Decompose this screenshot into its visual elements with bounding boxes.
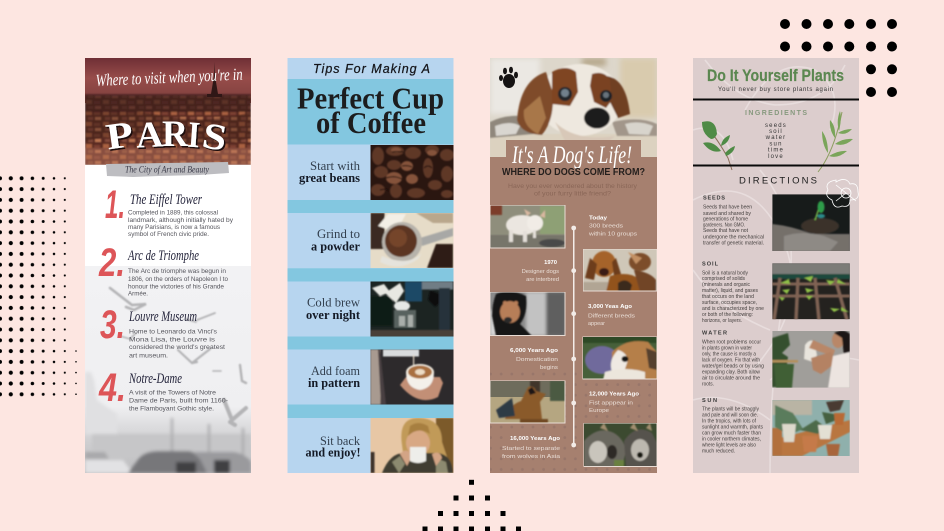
section: water: air to circulate around the bbox=[702, 376, 760, 382]
panel background bbox=[288, 58, 454, 473]
event: 12,000 years ago: 12,000 Years Ago bbox=[589, 392, 639, 398]
item 2: Arc de Triomphe: 2. bbox=[98, 241, 125, 285]
ingredients list: love bbox=[768, 154, 784, 160]
decoration: round dots top right bbox=[780, 19, 897, 97]
section: seeds: Seeds that have been bbox=[703, 204, 752, 210]
panel: DIY plants bbox=[693, 58, 859, 473]
event: 3,000 years ago bbox=[588, 304, 635, 327]
section: soil: (minerals and organic bbox=[702, 282, 750, 288]
intro text: of your furry little friend? bbox=[534, 190, 612, 198]
heading: directions: DIRECTIONS bbox=[739, 176, 817, 186]
section: sun: SUN bbox=[702, 398, 717, 404]
event: 3,000 years ago: Different breeds bbox=[588, 314, 635, 320]
ingredients list: INGREDIENTS bbox=[745, 110, 807, 117]
section: sun: in cooler northern climates, bbox=[702, 437, 761, 443]
event: 12,000 years ago: Fist apppear in bbox=[589, 401, 633, 407]
item 4: Notre-Dame: 4. bbox=[98, 366, 126, 410]
step 2: grind to a powder: Grind to bbox=[317, 226, 360, 241]
decoration: halftone dots left bbox=[0, 173, 77, 400]
section: soil: horizons, or layers. bbox=[702, 318, 742, 324]
heading: where do dogs come from: WHERE DO DOGS COME FROM? bbox=[502, 167, 645, 178]
photo: german shepherd bbox=[490, 380, 566, 424]
brush banner: subtitle bbox=[106, 162, 229, 177]
title: PARIS: P bbox=[103, 114, 136, 158]
header photo: Paris skyline bbox=[85, 58, 251, 165]
title: PARIS: I bbox=[187, 115, 201, 156]
item 3: Louvre Museum: Home to Leonardo da Vinci's bbox=[129, 328, 217, 335]
item 1: Eiffel Tower: 1. bbox=[105, 183, 125, 227]
item 1: Eiffel Tower: landmark, although initially hated by bbox=[128, 217, 234, 224]
step 3: cold brew over night: over night bbox=[306, 307, 361, 322]
title: where to visit: Where to visit when you're in bbox=[95, 65, 243, 90]
panel background bbox=[693, 58, 859, 473]
icon: right leaf branch bbox=[818, 111, 853, 172]
item 2: Arc de Triomphe: honour the victories of his Grande bbox=[128, 283, 225, 290]
item 2: Arc de Triomphe: Arc de Triomphe bbox=[127, 248, 199, 264]
section: water bbox=[702, 331, 850, 388]
section: soil: and is characterized by one bbox=[702, 306, 764, 312]
heading: perfect cup of coffee: of Coffee bbox=[316, 105, 426, 140]
intro text bbox=[508, 183, 638, 198]
section: water: water/gel beads or by using bbox=[702, 364, 764, 370]
item 3: Louvre Museum: 3. bbox=[100, 303, 125, 347]
divider bottom bbox=[693, 164, 859, 166]
step 5: sit back and enjoy: and enjoy! bbox=[306, 445, 360, 460]
step 4: add foam in pattern bbox=[308, 350, 454, 404]
item 3: Louvre Museum: Mona Lisa, the Louvre is bbox=[129, 336, 215, 343]
photo: hands with seedling bbox=[772, 194, 850, 251]
item 2: Arc de Triomphe: The Arc de triomphe was begun in bbox=[128, 268, 227, 275]
event: 12,000 years ago: Europe bbox=[589, 408, 609, 414]
event: 16,000 years ago bbox=[502, 436, 561, 460]
item 1: Eiffel Tower bbox=[105, 183, 234, 238]
section: sun bbox=[702, 398, 850, 456]
photo: seedlings in tray bbox=[772, 263, 850, 320]
section: water: expanding clay. Both allow bbox=[702, 370, 760, 376]
event: 3,000 years ago: 3,000 Yeas Ago bbox=[588, 304, 632, 310]
step 3: cold brew over night: Cold brew bbox=[307, 295, 361, 310]
sky-blue bands bbox=[288, 79, 454, 418]
section: sun: and pale and will soon die. bbox=[702, 413, 758, 419]
panel: dog timeline bbox=[490, 58, 657, 473]
section: soil: comprised of solids bbox=[702, 276, 745, 282]
event: today: within 10 groups bbox=[588, 232, 637, 238]
step 4: add foam in pattern: Add foam bbox=[311, 363, 360, 378]
event: 6,000 years ago: Domestication bbox=[516, 357, 558, 363]
step 2: grind to a powder: a powder bbox=[311, 238, 360, 254]
item 4: Notre-Dame bbox=[98, 366, 228, 412]
item 2: Arc de Triomphe: 1806, on the orders of Napoleon I to bbox=[128, 276, 229, 283]
item 2: Arc de Triomphe: Armée. bbox=[128, 291, 148, 298]
section: seeds: SEEDS bbox=[703, 196, 725, 202]
section: sun: can grow much faster than bbox=[702, 431, 761, 437]
event: 6,000 years ago: begins bbox=[540, 365, 558, 371]
item 4: Notre-Dame: the Flamboyant Gothic style. bbox=[129, 405, 214, 412]
section: soil: that occurs on the land bbox=[702, 294, 754, 300]
section: soil: SOIL bbox=[702, 262, 719, 268]
section: seeds: gardeners. Non GMO. bbox=[703, 222, 745, 228]
ingredients list: sun bbox=[769, 142, 783, 148]
photo: woman watering plants bbox=[772, 331, 850, 388]
decoration: square dots triangle bottom bbox=[422, 480, 521, 531]
event: today: Today bbox=[589, 216, 608, 222]
pale line-art leaves bbox=[693, 60, 859, 473]
section: soil: or both of the following: bbox=[702, 312, 753, 318]
panel background bbox=[85, 58, 251, 473]
event: 6,000 years ago bbox=[510, 348, 558, 371]
photo: white chihuahua bbox=[490, 205, 566, 248]
ingredients list: soil bbox=[769, 129, 783, 135]
item 3: Louvre Museum: Louvre Museum bbox=[128, 309, 197, 325]
photo: ground coffee in portafilter bbox=[370, 213, 454, 268]
event: today bbox=[588, 216, 637, 238]
event: 16,000 years ago: from wolves in Asia bbox=[502, 454, 561, 460]
section: soil bbox=[702, 262, 850, 324]
section: soil: matter), liquid, and gases bbox=[702, 288, 758, 294]
heading: perfect cup of coffee bbox=[297, 80, 444, 140]
photo: collie in flowers bbox=[582, 336, 657, 380]
intro text: Have you ever wondered about the history bbox=[508, 183, 638, 190]
icon: paw print bbox=[499, 67, 518, 88]
item 1: Eiffel Tower: many Parisians, is now a famous bbox=[128, 224, 220, 231]
item 4: Notre-Dame: Notre-Dame bbox=[128, 371, 182, 387]
section: sun: In the tropics, with lots of bbox=[702, 419, 757, 425]
panel: coffee tips bbox=[288, 58, 454, 473]
heading: it's a dog's life: It's A Dog's Life! bbox=[511, 142, 632, 169]
event: 1970: Designer dogs bbox=[522, 269, 559, 275]
photo: woman drinking coffee bbox=[370, 418, 454, 473]
section: seeds: Seeds that have not bbox=[703, 228, 749, 234]
icon: line-art flower bbox=[827, 179, 858, 207]
event: 1970: 1970 bbox=[544, 260, 557, 266]
step 1: start with great beans: great beans bbox=[299, 170, 360, 185]
heading: do it yourself plants: Do It Yourself Plants bbox=[707, 67, 844, 85]
event: 12,000 years ago bbox=[589, 392, 639, 414]
item 1: Eiffel Tower: Completed in 1889, this colossal bbox=[128, 210, 218, 216]
section: sun: much reduced. bbox=[702, 449, 735, 455]
step 3: cold brew over night bbox=[306, 282, 454, 337]
section: sun: The plants will be straggly bbox=[702, 407, 759, 413]
step 2: grind to a powder bbox=[311, 213, 454, 268]
brush banner: subtitle: The City of Art and Beauty bbox=[125, 164, 209, 174]
divider top bbox=[693, 98, 859, 100]
section: seeds: generations of home bbox=[703, 217, 748, 223]
title: PARIS: S bbox=[199, 115, 230, 160]
item 4: Notre-Dame: Dame de Paris, built from 1160- bbox=[129, 397, 228, 404]
section: sun: where light levels are also bbox=[702, 443, 756, 449]
event: 6,000 years ago: 6,000 Years Ago bbox=[510, 348, 558, 354]
photo: black and tan dog bbox=[490, 292, 566, 336]
ingredients list bbox=[745, 110, 807, 160]
section: water: only, the cause is mostly a bbox=[702, 352, 756, 358]
step 5: sit back and enjoy bbox=[306, 418, 454, 473]
step 1: start with great beans: Start with bbox=[310, 158, 360, 173]
dotted texture bbox=[490, 368, 657, 473]
event: today: 300 breeds bbox=[589, 224, 623, 230]
item 3: Louvre Museum: considered the world's greatest bbox=[129, 344, 225, 351]
heading: perfect cup of coffee: Perfect Cup bbox=[297, 80, 444, 116]
section: water: in plants grown in water bbox=[702, 346, 752, 352]
event: 1970 bbox=[522, 260, 559, 283]
section: soil: surface, occupies space, bbox=[702, 300, 757, 306]
item 1: Eiffel Tower: symbol of French civic pride. bbox=[128, 231, 209, 238]
title: PARIS: A bbox=[135, 114, 164, 157]
event: 3,000 years ago: appear bbox=[588, 321, 605, 327]
panel background bbox=[490, 58, 657, 473]
item 1: Eiffel Tower: The Eiffel Tower bbox=[130, 192, 202, 208]
item 4: Notre-Dame: A visit of the Towers of Notre bbox=[129, 389, 217, 396]
photo: potted plants on shelf bbox=[772, 400, 850, 456]
event: 1970: are interbred bbox=[526, 277, 559, 283]
photo: coffee beans bbox=[370, 145, 454, 200]
section: seeds: saved and shared by bbox=[703, 211, 751, 217]
street photo background bbox=[85, 266, 251, 473]
photo: two dachshunds bbox=[583, 249, 657, 292]
birds bbox=[110, 288, 246, 425]
timeline bbox=[571, 226, 576, 447]
section: seeds: undergone the mechanical bbox=[703, 234, 764, 240]
heading: tips for making a: Tips For Making A bbox=[313, 62, 430, 76]
step 1: start with great beans bbox=[299, 145, 454, 200]
photo: coffee machine bbox=[370, 282, 454, 336]
ingredients list: seeds bbox=[765, 123, 787, 129]
ingredients list: time bbox=[768, 148, 784, 154]
title tab bbox=[506, 140, 641, 158]
event: 16,000 years ago: Started to separate bbox=[502, 446, 560, 452]
title: PARIS: R bbox=[162, 114, 189, 155]
item 3: Louvre Museum bbox=[100, 303, 225, 359]
photo: two wolves bbox=[584, 423, 657, 467]
ingredients list: water bbox=[765, 135, 786, 141]
section: water: roots. bbox=[702, 382, 714, 388]
event: 16,000 years ago: 16,000 Years Ago bbox=[510, 436, 560, 442]
section: sun: sunlight and warmth, plants bbox=[702, 425, 763, 431]
step 4: add foam in pattern: in pattern bbox=[308, 375, 361, 390]
section: water: WATER bbox=[702, 331, 727, 337]
photo: spaniel lying down bbox=[490, 58, 657, 157]
item 3: Louvre Museum: art museum. bbox=[129, 352, 168, 359]
item 2: Arc de Triomphe bbox=[98, 241, 229, 298]
icon: left leaf branch bbox=[702, 121, 735, 170]
step 5: sit back and enjoy: Sit back bbox=[320, 433, 360, 448]
title: PARIS bbox=[103, 114, 230, 160]
photo: latte art pour bbox=[370, 350, 454, 404]
section: seeds bbox=[703, 179, 858, 252]
section: water: When root problems occur bbox=[702, 340, 761, 346]
panel: Paris guide bbox=[85, 58, 251, 473]
section: water: lack of oxygen. Fix that with bbox=[702, 358, 760, 364]
section: seeds: transfer of genetic material. bbox=[703, 240, 764, 246]
subheading: You'll never buy store plants again bbox=[718, 87, 833, 93]
section: soil: Soil is a natural body bbox=[702, 270, 748, 276]
